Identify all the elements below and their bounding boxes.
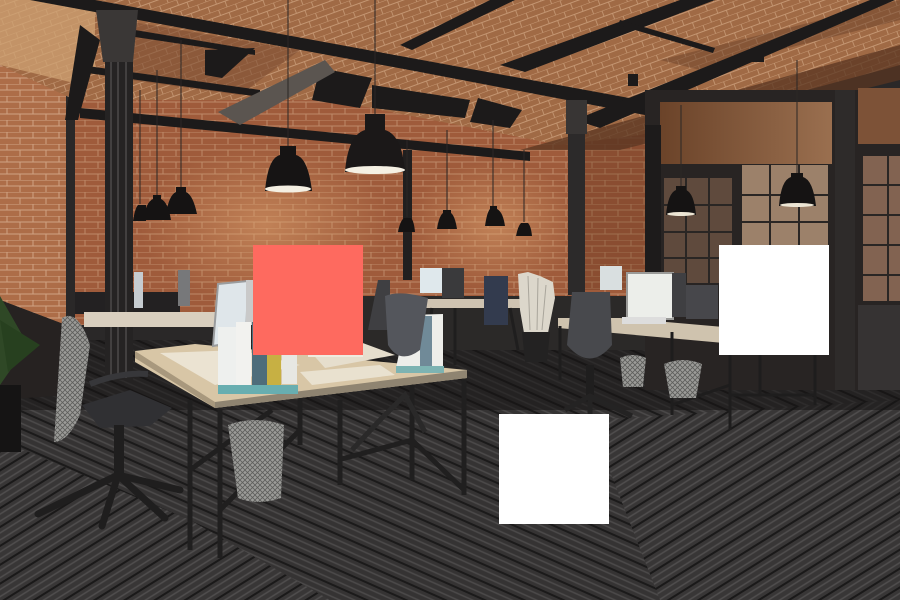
rear iron columns	[403, 100, 587, 295]
front office chair	[38, 316, 180, 526]
white square right	[719, 245, 829, 355]
right glass partition	[645, 88, 900, 390]
ceiling beams and ducts	[30, 0, 895, 161]
right office chair	[565, 292, 632, 418]
main desk	[135, 340, 467, 558]
back brick wall	[75, 100, 650, 350]
white square bottom	[499, 414, 609, 524]
background desks and monitors	[84, 266, 622, 365]
floor	[0, 340, 900, 600]
left brick wall	[0, 65, 66, 400]
left iron column	[96, 10, 138, 380]
pendant lamps	[133, 0, 816, 236]
right desk	[558, 273, 815, 430]
rolled plans in bin	[518, 272, 555, 362]
coral square	[253, 245, 363, 355]
brick ceiling	[0, 0, 900, 150]
main desk monitors and organisers	[213, 280, 444, 394]
plant left	[0, 296, 40, 452]
desk centre chair	[352, 293, 428, 450]
